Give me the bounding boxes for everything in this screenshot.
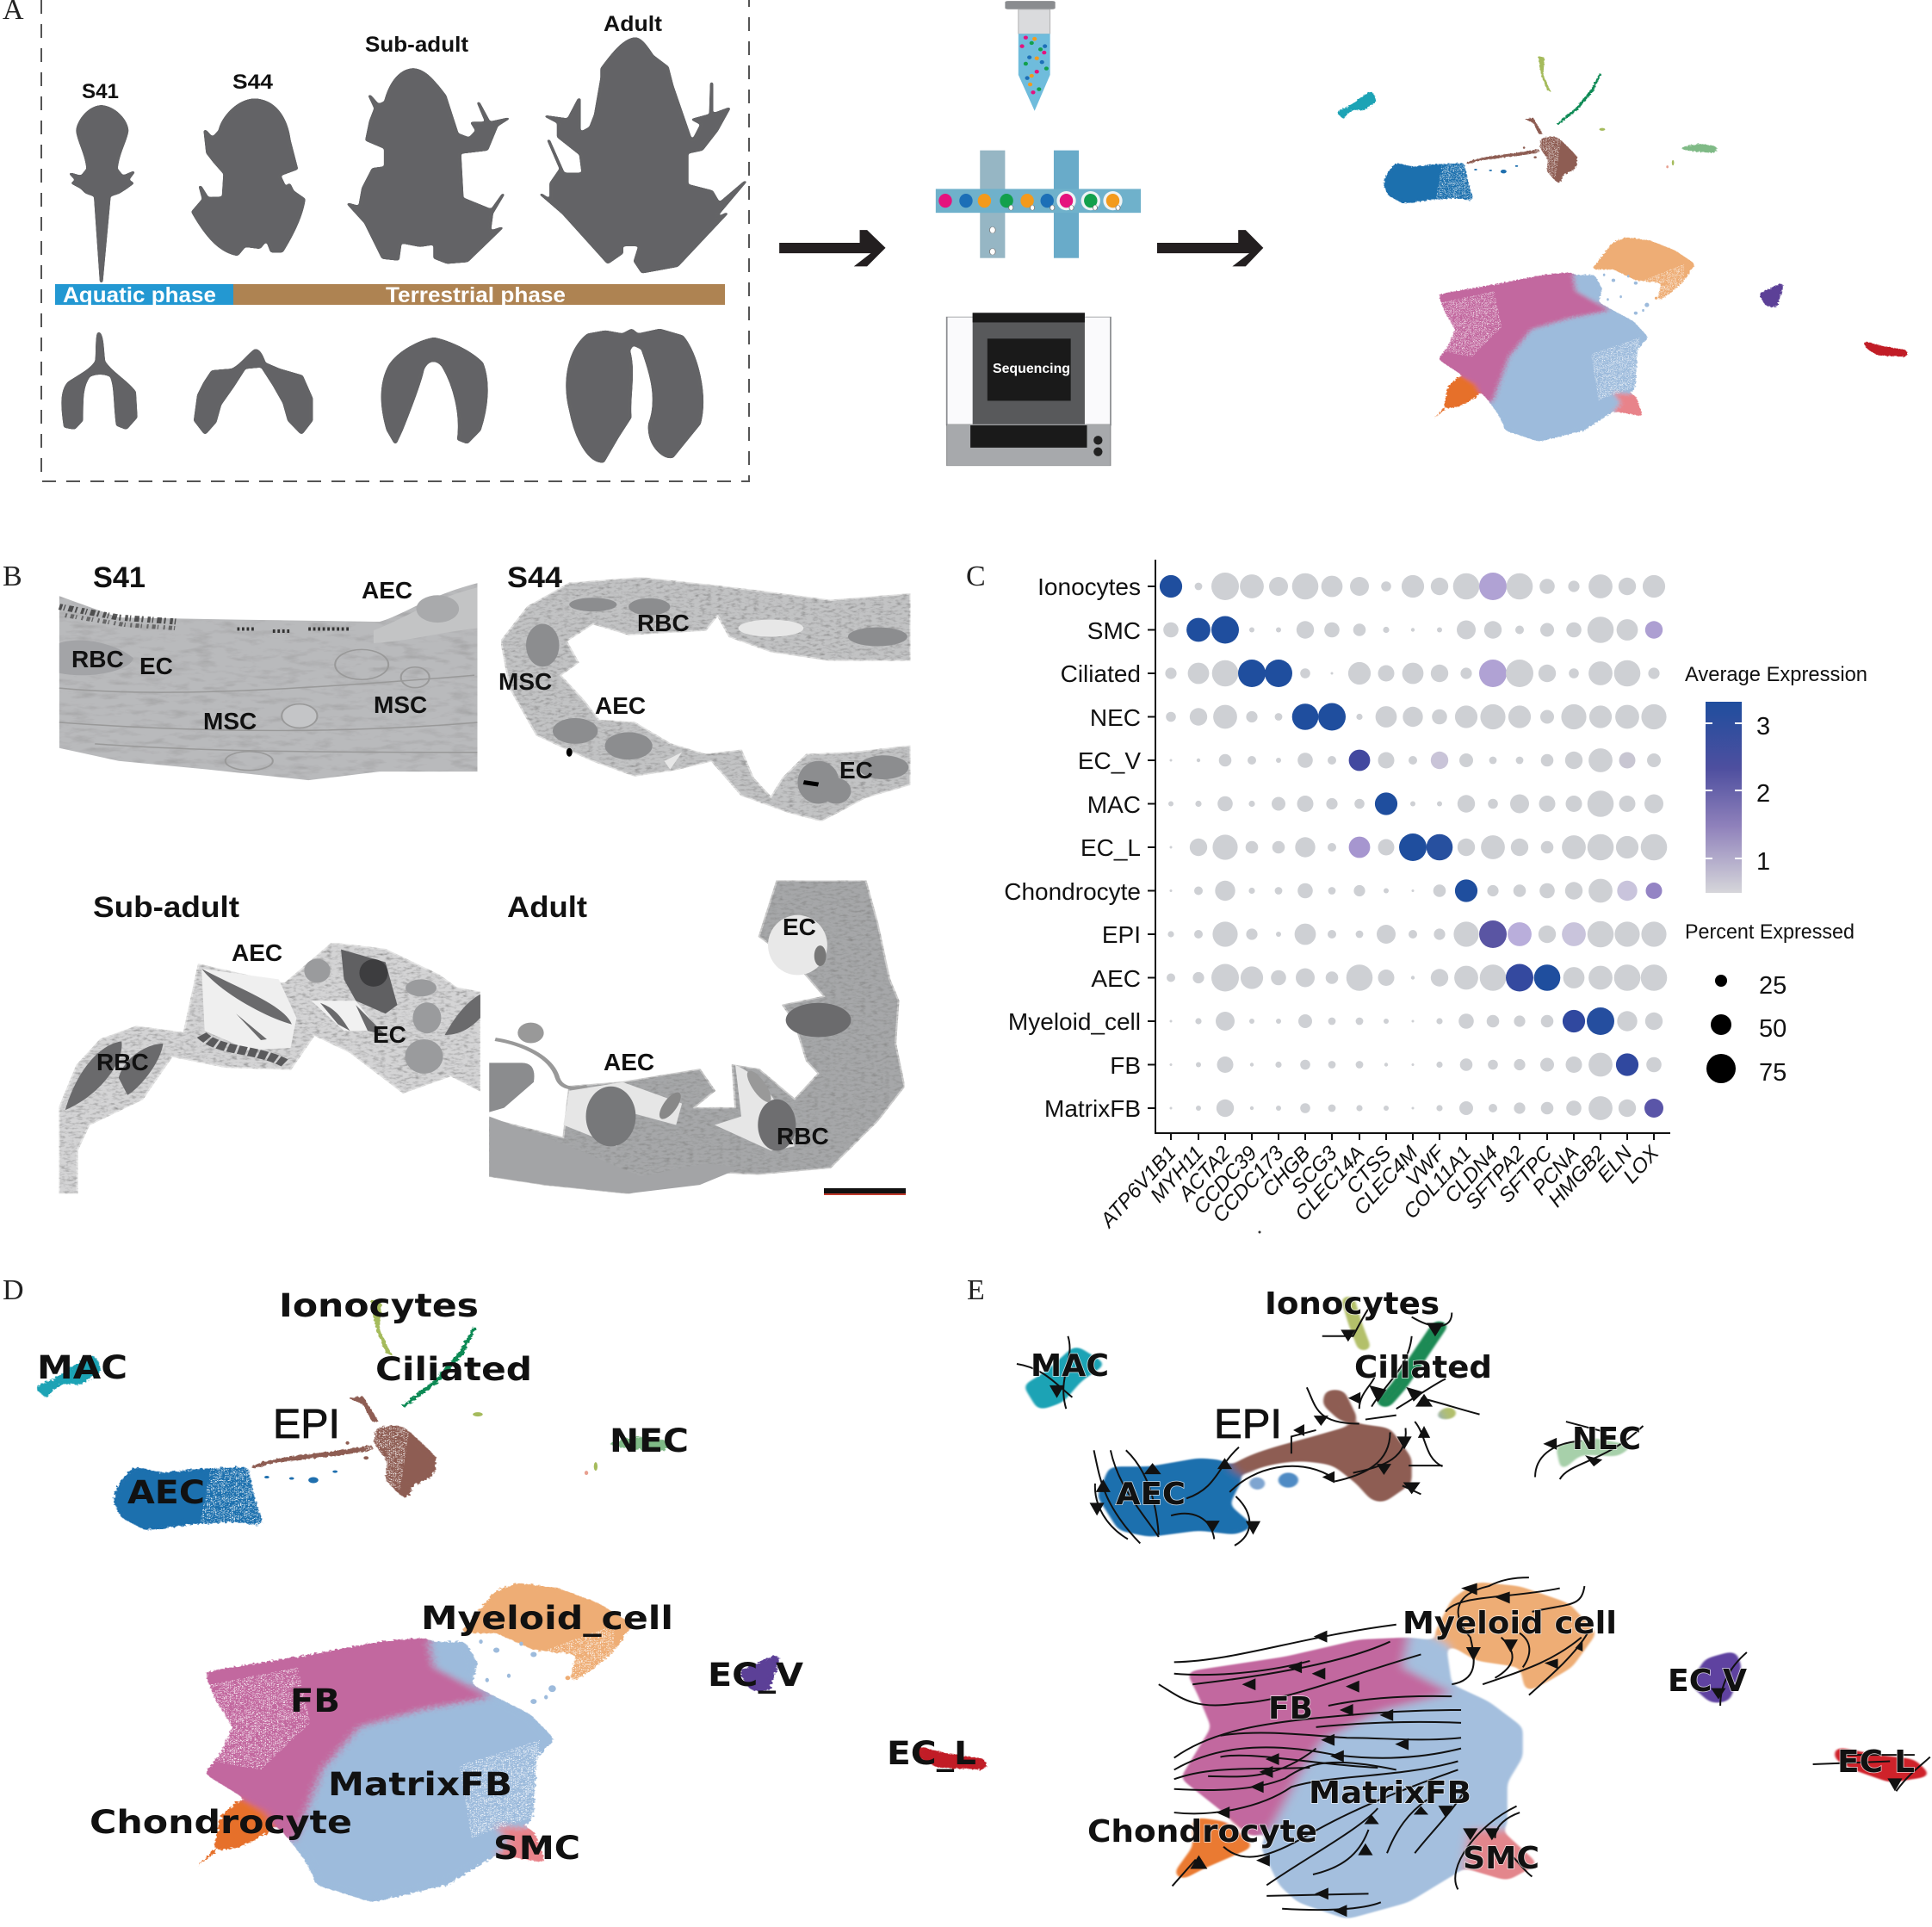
Adult cell labels: AEC [604,1049,654,1075]
cluster: MatrixFB [292,1642,555,1902]
cluster labels: NEC [1572,1422,1641,1457]
gene labels: ATP6V1B1 [1095,1142,1180,1233]
cluster labels: Ciliated [375,1351,532,1388]
row labels: Myeloid_cell [1008,1008,1141,1035]
icon: sub-adult frog silhouette [349,69,508,263]
legend: percent expressed: 75 [1759,1059,1786,1087]
legend: average expression: 2 [1756,780,1770,808]
S41 title: S41 [93,561,146,594]
terrestrial phase bar [233,283,725,307]
cluster labels: Myeloid cell [1403,1606,1617,1641]
cluster labels: SMC [493,1830,580,1867]
micrograph: adult [489,881,904,1193]
cluster: SMC [497,1825,546,1864]
stray print dot [1259,1231,1260,1233]
row labels: EPI [1102,921,1141,948]
cluster: Myeloid_cell [459,1583,633,1684]
arrow: library prep to clustering [1157,230,1263,266]
cluster: FB [1180,1638,1452,1838]
gene labels: VWF [1402,1141,1450,1192]
row: MAC [1168,790,1663,817]
cluster: Ionocytes [1347,1296,1365,1351]
cluster: AEC [1097,1458,1254,1537]
cluster: Chondrocyte [214,1800,273,1851]
gene labels: PCNA [1528,1142,1583,1200]
stage label S44: S44 [232,71,274,94]
panel letter D: D [3,1274,24,1306]
plot axes [1148,560,1670,1140]
cluster: MAC [32,1352,102,1407]
icon: adult lung silhouette [567,330,702,462]
cluster: Ciliated [402,1328,476,1408]
workflow icons [779,1,1263,466]
arrow: specimens to library prep [779,230,886,266]
micrograph: S44 [501,578,910,821]
cluster labels: NEC [610,1422,689,1459]
cluster labels: EC_L [887,1735,976,1772]
cluster labels: AEC [127,1474,205,1511]
row: MatrixFB [1169,1096,1663,1120]
panel B: histology sections [3,561,910,1195]
row: EC_L [1169,833,1667,861]
cluster labels: Ionocytes [1265,1286,1440,1322]
cluster: EPI [1229,1424,1412,1503]
panel A: experimental workflow [3,0,1908,481]
cluster labels [1031,1286,1915,1876]
stage label S41: S41 [82,80,119,103]
cluster: EC_V [739,1652,782,1693]
Sub-adult cell labels: EC [373,1021,406,1048]
row labels: Chondrocyte [1004,878,1141,905]
stage label Sub-adult: Sub-adult [365,33,469,57]
cluster: EPI arm [1322,1390,1359,1422]
cluster: MatrixFB [1260,1638,1523,1919]
cluster labels: MAC [1031,1348,1109,1384]
cluster: Chondrocyte tail [197,1847,217,1866]
thin cluster group [197,1300,476,1866]
cluster labels: AEC [1116,1477,1186,1512]
row labels: FB [1110,1052,1141,1079]
cluster labels: MatrixFB [1309,1775,1471,1811]
S41 cell labels: EC [139,653,173,679]
cluster labels: MatrixFB [328,1766,512,1803]
row: EC_V [1169,748,1661,772]
panel letter E: E [967,1274,985,1306]
legend: average expression: Average Expression [1685,663,1867,686]
icon: S41 lung silhouette [63,333,136,429]
micrograph: sub-adult [59,943,480,1193]
cluster labels: EPI [273,1402,340,1447]
S41 cell labels: MSC [374,691,427,718]
S41 cell labels: AEC [362,577,412,604]
streamline arrowheads [1050,1323,1903,1917]
row labels: EC_V [1078,747,1141,774]
row: SMC [1163,617,1663,644]
cluster: Ciliated [1381,1321,1443,1407]
stage label Adult: Adult [604,12,663,36]
gene labels: CLDN4 [1440,1142,1502,1208]
icon: sequencer [947,313,1111,466]
cluster: Chondrocyte [1174,1817,1254,1881]
cluster group: rounded scatter shapes [32,1352,987,1902]
scale bar [824,1188,906,1195]
cluster: EPI [372,1426,437,1498]
Sub-adult title: Sub-adult [93,891,239,924]
cluster: Myeloid_cell [1434,1582,1597,1693]
cluster: NEC [1554,1436,1637,1475]
cluster: FB [205,1638,490,1843]
frog silhouettes and lungs [63,38,746,462]
Sub-adult cell labels: RBC [96,1049,149,1075]
legend: percent expressed: 50 [1759,1015,1786,1043]
cluster labels: FB [1268,1691,1313,1726]
gene labels: ACTA2 [1173,1142,1235,1207]
gene labels: SCG3 [1287,1141,1342,1199]
row labels: MAC [1087,791,1141,818]
row labels [1004,573,1141,1122]
streamlines [1017,1304,1930,1910]
cluster labels: EC V [1668,1664,1747,1699]
cluster labels: Ciliated [1354,1350,1492,1385]
Adult cell labels: EC [783,914,816,940]
gene labels: CLEC14A [1291,1142,1369,1225]
panel E: RNA velocity streamlines [967,1274,1932,1919]
icon: S41 tadpole silhouette [71,106,133,282]
velocity cluster shapes [1023,1296,1932,1919]
cluster labels: Ionocytes [279,1287,479,1324]
icon: S44 lung silhouette [195,350,312,433]
scattered cells [264,1412,598,1704]
row: Ionocytes [1160,573,1665,600]
cluster: EC_L [912,1744,987,1769]
dots [1160,573,1667,1120]
cluster: EPI bridge [251,1445,372,1469]
cluster: EC_L [1835,1746,1932,1782]
Sub-adult cell labels: AEC [232,939,282,966]
icon: adult frog silhouette [542,38,746,272]
panel D: UMAP of cell clusters [3,1274,987,1902]
cluster labels: SMC [1463,1841,1539,1876]
cluster labels: Chondrocyte [1087,1814,1317,1850]
gene labels [1095,1141,1664,1233]
row labels: SMC [1087,617,1141,644]
row: Ciliated [1165,660,1660,687]
icon: microfluidic chip [936,151,1141,258]
row labels: MatrixFB [1044,1095,1141,1122]
gene labels: ELN [1593,1141,1638,1187]
row: Myeloid_cell [1169,1007,1663,1035]
icon: sub-adult lung silhouette [382,338,486,443]
cluster labels [37,1287,976,1867]
row: NEC [1166,703,1667,730]
terrestrial phase bar: Terrestrial phase [386,283,566,307]
gene labels: CCDC173 [1208,1141,1289,1227]
gene labels: CCDC39 [1189,1142,1261,1218]
gene labels: SFTPC [1495,1141,1557,1207]
gene labels: CLEC4M [1349,1142,1422,1219]
cluster: NEC [605,1436,670,1452]
gene labels: CHGB [1258,1142,1315,1202]
legend: average expression [1685,663,1867,893]
Adult cell labels: RBC [777,1123,829,1149]
cluster labels: EPI [1214,1402,1282,1447]
panel letter B: B [3,561,22,592]
sequencer screen label: Sequencing [993,362,1070,376]
S44 cell labels: MSC [498,668,552,695]
cluster: EC_V [1689,1651,1742,1704]
cluster: SMC [1464,1830,1539,1881]
row: EPI [1167,920,1667,948]
row labels: AEC [1091,965,1141,992]
legend: average expression: 3 [1756,713,1770,740]
row: Chondrocyte [1169,879,1662,902]
S44 cell labels: AEC [595,692,646,719]
S41 cell labels: MSC [203,708,257,734]
row labels: Ionocytes [1037,573,1141,600]
icon: S44 froglet silhouette [193,99,304,255]
panel C: dot plot [966,560,1867,1233]
UMAP overview [1334,56,1908,442]
panel letter C: C [966,561,986,592]
sparse speckle overlay [199,1424,614,1838]
cluster: EPI arm [349,1396,379,1422]
S44 cell labels: RBC [637,610,690,636]
row labels: Ciliated [1061,660,1141,687]
cluster labels: EC_V [708,1657,803,1694]
micrograph: S41 [59,583,477,780]
ionocyte droplet [1440,1406,1458,1420]
legend: percent expressed [1685,920,1855,1087]
gene labels: COL11A1 [1399,1142,1476,1224]
legend: average expression: 1 [1756,848,1770,876]
row: FB [1169,1053,1662,1076]
Adult title: Adult [507,891,587,924]
Adult cell labels [604,914,829,1149]
row labels: NEC [1090,704,1141,731]
legend: percent expressed: Percent Expressed [1685,920,1855,944]
faint AEC droplets [1248,1410,1446,1491]
gene labels: HMGB2 [1544,1142,1610,1211]
gene labels: CTSS [1342,1142,1396,1199]
S44 cell labels: EC [839,757,873,784]
cluster: Ionocytes [371,1300,392,1355]
cluster labels: Chondrocyte [90,1804,352,1841]
S44 cell labels [498,610,873,784]
row labels: EC_L [1081,834,1141,861]
cluster labels: EC L [1837,1744,1915,1780]
cluster: MAC [1023,1345,1106,1411]
dashed frame [41,0,749,481]
S44 title: S44 [507,561,562,594]
S41 cell labels [71,577,427,734]
gene labels: LOX [1619,1141,1664,1188]
gene labels: SFTPA2 [1461,1142,1529,1214]
cluster labels: MAC [37,1349,127,1386]
UMAP scatter clusters [32,1300,987,1902]
cluster labels: Myeloid_cell [421,1600,673,1637]
gene labels: MYH11 [1146,1142,1208,1207]
legend: percent expressed: 25 [1759,972,1786,1000]
icon: cell suspension tube [1005,1,1056,111]
aquatic phase bar: Aquatic phase [63,283,216,307]
Sub-adult cell labels [96,939,406,1075]
S41 cell labels: RBC [71,646,124,672]
cluster: AEC [113,1466,263,1531]
cluster labels: FB [290,1682,340,1719]
row: AEC [1167,964,1667,992]
